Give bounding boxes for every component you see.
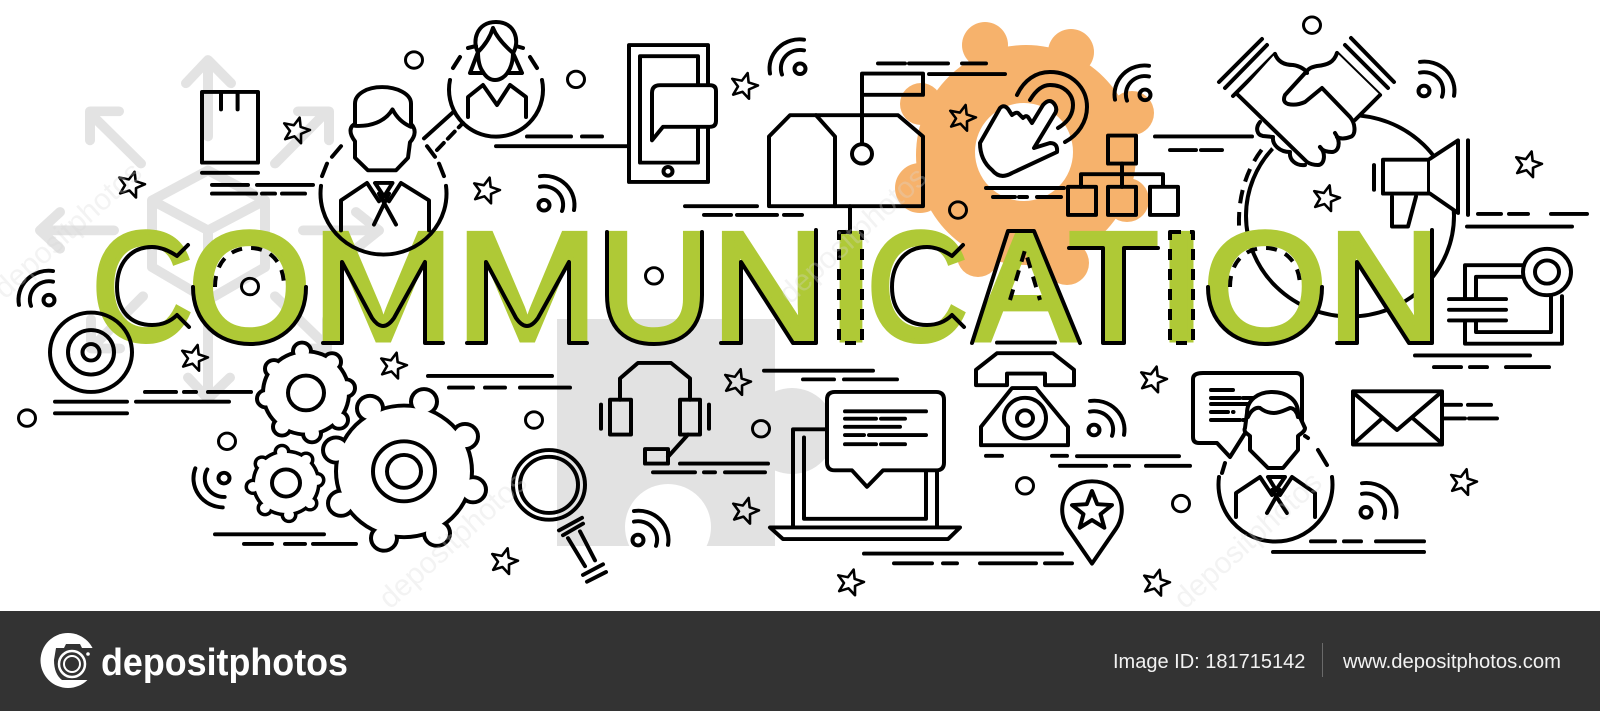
gray puzzle piece background	[557, 319, 835, 576]
right lower icon layer	[1060, 355, 1549, 597]
title: COMMUNICATION: I	[1155, 199, 1208, 373]
icon: rotary telephone	[976, 343, 1074, 456]
upper icon layer	[19, 17, 1587, 344]
footer bar	[0, 611, 1600, 711]
small circles	[242, 17, 1320, 295]
icon: medium gear	[259, 345, 353, 440]
icon: man with speech bubble	[1193, 373, 1332, 542]
diagonal watermark text: depositphotos	[773, 161, 934, 310]
gray cube with radiating arrows	[40, 60, 379, 399]
stars	[178, 342, 866, 597]
icon: wifi signal	[1360, 483, 1396, 518]
icon: man in circle	[320, 87, 446, 255]
icon: large gear	[325, 391, 484, 549]
small circle	[1172, 495, 1190, 512]
icon: mailbox	[769, 74, 923, 232]
title: COMMUNICATION: O	[1203, 201, 1327, 373]
diagonal watermark text	[0, 156, 1329, 615]
icon: smartphone with message bubble	[629, 45, 716, 182]
icon: location pin with star	[1062, 481, 1122, 564]
icon: wifi signal	[1088, 401, 1124, 436]
small circles	[18, 410, 1034, 494]
icon: package box	[202, 92, 258, 163]
icon: bullseye	[50, 313, 132, 392]
icon: headset	[601, 363, 709, 464]
icon: connected device	[1449, 249, 1571, 344]
icon: wifi signal	[189, 467, 230, 508]
stars	[1137, 363, 1479, 597]
icon: wifi signal	[770, 39, 806, 75]
diagonal watermark text: depositphotos	[1168, 466, 1329, 615]
icon: wifi signal	[538, 176, 574, 211]
icon: envelope	[1353, 391, 1442, 445]
icon: magnifying glass	[513, 450, 606, 582]
icon: wifi signal	[632, 511, 668, 546]
orange gear	[895, 22, 1154, 285]
website url: www.depositphotos.com	[1342, 651, 1561, 673]
icon: small gear	[248, 447, 322, 520]
title: COMMUNICATION: O	[188, 200, 311, 374]
icon: wifi signal	[1418, 62, 1454, 97]
icon: woman in circle	[449, 22, 543, 137]
logo: camera in circle	[40, 633, 96, 688]
icon: wifi signal	[1115, 65, 1150, 101]
title: COMMUNICATION: C	[866, 201, 968, 374]
diagonal watermark text: depositphotos	[373, 466, 534, 615]
title: COMMUNICATION: T	[1068, 201, 1159, 374]
image id: Image ID: 181715142	[1113, 651, 1305, 673]
icon: laptop with chat bubble	[770, 392, 960, 539]
detailed icon layer	[449, 22, 1394, 542]
title: COMMUNICATION: N	[711, 201, 827, 373]
title: COMMUNICATION: M	[311, 200, 455, 373]
title: COMMUNICATION: U	[597, 201, 713, 373]
icon: touch hand	[980, 72, 1087, 197]
icon: megaphone	[1374, 140, 1468, 227]
lower icon layer	[18, 313, 1074, 597]
logo wordmark: depositphotos	[101, 642, 348, 684]
globe behind title	[1239, 115, 1454, 317]
title: COMMUNICATION: N	[1327, 201, 1443, 373]
title: COMMUNICATION: A	[974, 199, 1077, 373]
icon: wifi signal	[19, 271, 54, 306]
connector lines between people	[424, 112, 463, 150]
title: COMMUNICATION: I	[826, 199, 876, 373]
icon: handshake	[1219, 38, 1394, 166]
title: COMMUNICATION: M	[455, 200, 599, 373]
title: COMMUNICATION: C	[92, 201, 193, 374]
title: COMMUNICATION	[92, 199, 1443, 374]
stars	[115, 70, 1544, 212]
black line accents on the title letters	[117, 230, 1432, 344]
icon: org chart	[1068, 136, 1178, 215]
